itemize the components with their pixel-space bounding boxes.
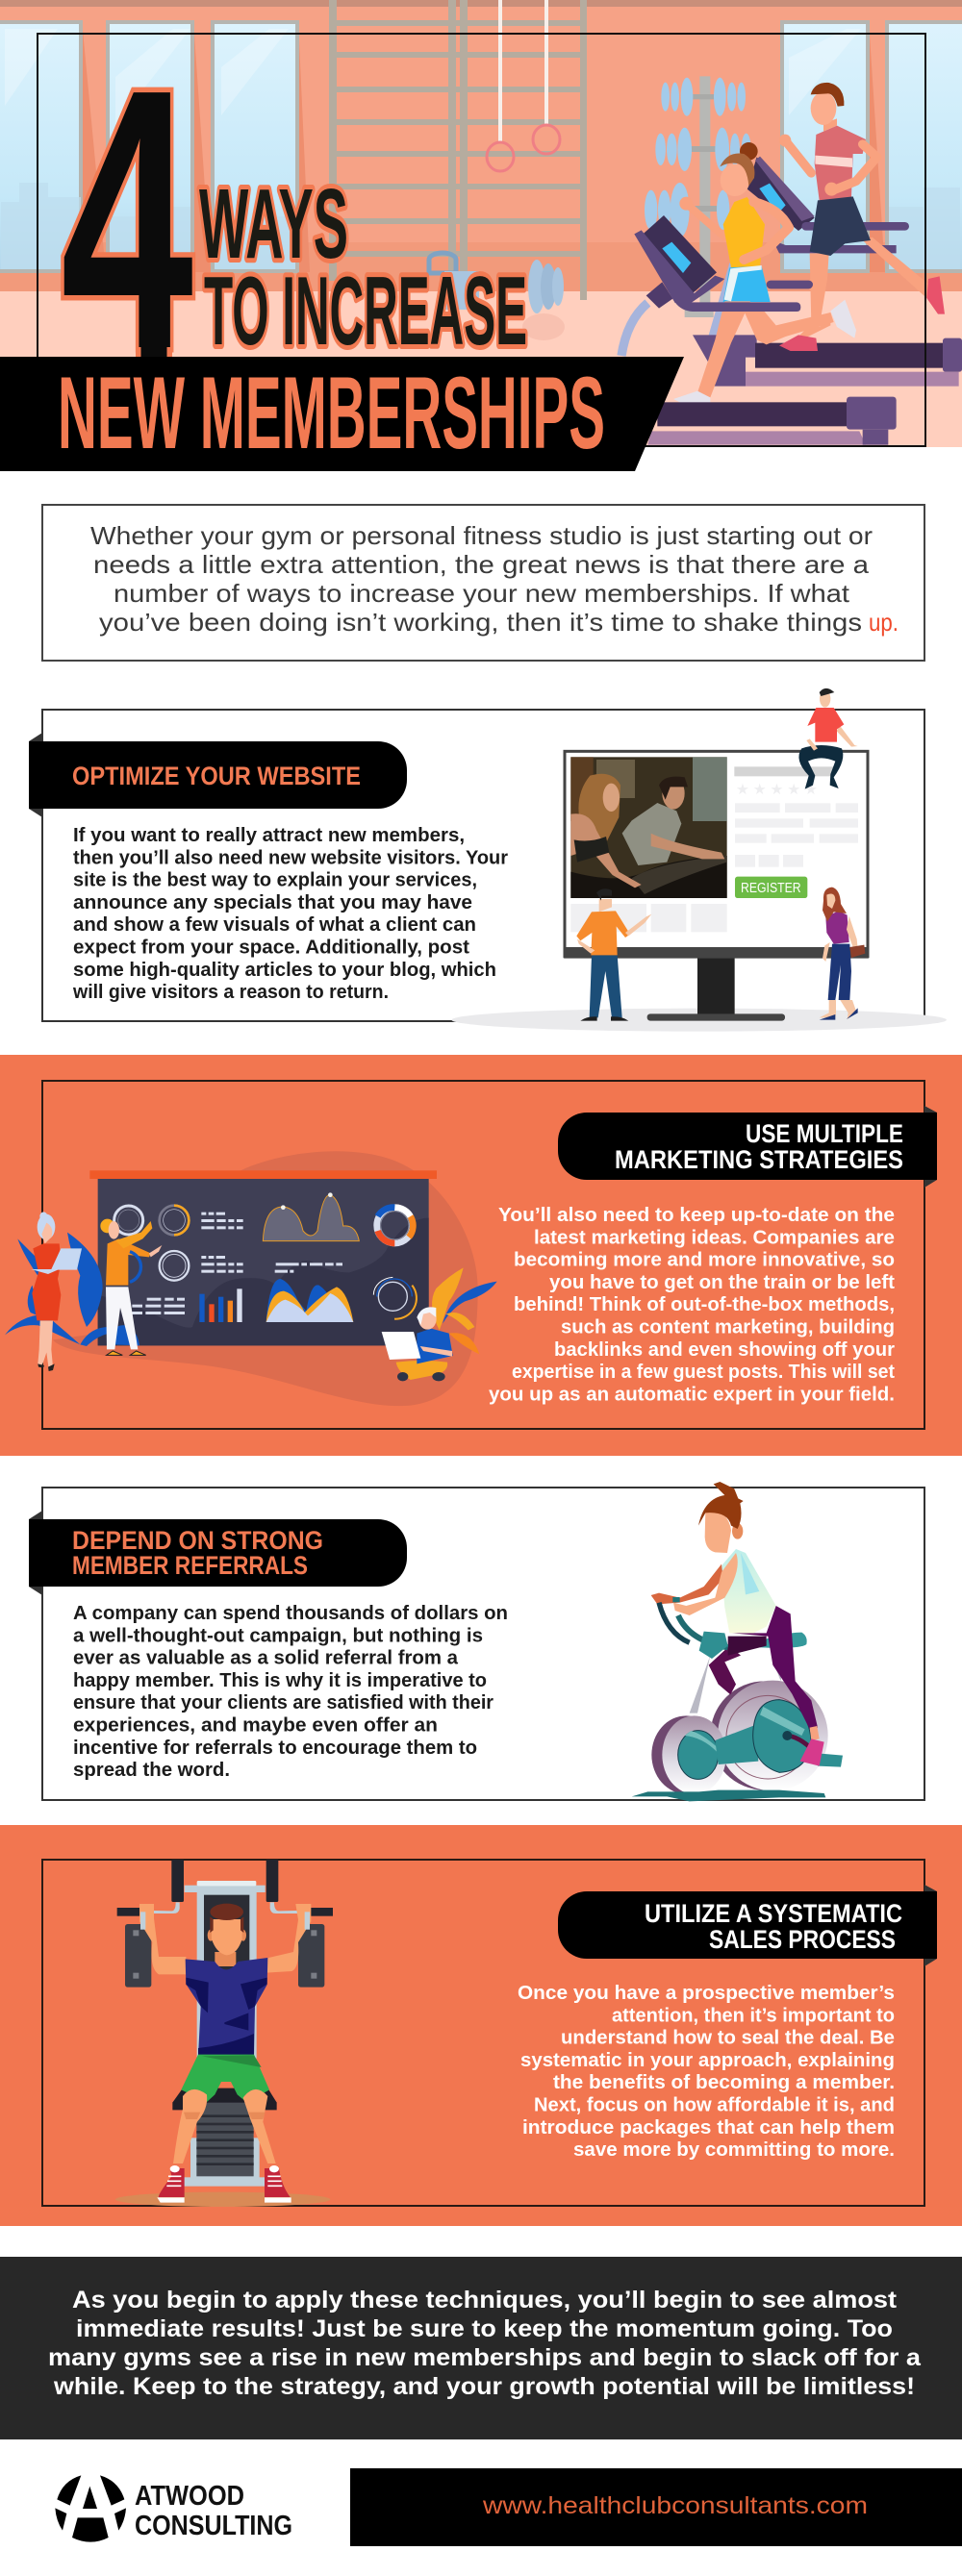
heading badge: MARKETING STRATEGIES — [615, 1145, 903, 1174]
intro panel: you’ve been doing isn’t working, then it’s time to shake things — [99, 608, 862, 637]
woman — [578, 774, 620, 849]
body text — [518, 1983, 895, 2161]
body text: save more by committing to more. — [573, 2139, 895, 2161]
monitor — [564, 751, 869, 1021]
body text: A company can spend thousands of dollars on — [73, 1603, 508, 1624]
frame — [715, 1700, 843, 1772]
ring gauges — [114, 1206, 417, 1319]
logo: atwood consulting: CONSULTING — [135, 2511, 292, 2541]
intro panel: number of ways to increase your new memberships. If what — [114, 579, 850, 608]
plant left — [5, 1233, 139, 1346]
arms — [651, 1553, 738, 1615]
website url bar: www.healthclubconsultants.com — [482, 2492, 868, 2519]
body text: the benefits of becoming a member. — [553, 2072, 895, 2093]
panel: depend on strong member referrals — [29, 1482, 924, 1801]
body text: such as content marketing, building — [561, 1317, 895, 1338]
register button — [735, 877, 807, 898]
closing statement panel: many gyms see a rise in new memberships and begin to slack off for a — [48, 2344, 922, 2371]
illustration: woman on exercise bike — [632, 1482, 843, 1801]
body text: expertise in a few guest posts. This will set — [512, 1362, 895, 1383]
left windows — [0, 20, 310, 272]
body text: a well-thought-out campaign, but nothing is — [73, 1625, 483, 1646]
seat and post — [690, 1633, 807, 1713]
icon: logo mark — [55, 2475, 126, 2542]
head — [208, 1904, 246, 1966]
page placeholder blocks: ★★★★★ — [736, 782, 822, 798]
closing statement panel: As you begin to apply these techniques, you’ll begin to see almost — [72, 2287, 898, 2313]
illustration: website on monitor with people — [451, 688, 947, 1032]
infographic page: TO INCREASE — [204, 258, 527, 365]
body text: ensure that your clients are satisfied with their — [73, 1692, 494, 1713]
body text: You’ll also need to keep up-to-date on the — [498, 1205, 895, 1226]
handlebars — [659, 1597, 728, 1659]
body text: attention, then it’s important to — [612, 2005, 895, 2026]
body text: will give visitors a reason to return. — [72, 982, 389, 1003]
person: woman with laptop — [31, 1212, 82, 1371]
body text: site is the best way to explain your services, — [73, 870, 477, 891]
register button: REGISTER — [741, 881, 801, 896]
head and hair — [698, 1482, 744, 1553]
body text: you up as an automatic expert in your field. — [489, 1384, 895, 1405]
rear wheel — [710, 1681, 828, 1790]
intro panel: needs a little extra attention, the great news is that there are a — [93, 550, 870, 579]
numeral 4: 4 — [61, 12, 195, 426]
person: man in red sitting — [798, 688, 858, 789]
closing statement panel: while. Keep to the strategy, and your growth potential will be limitless! — [53, 2373, 915, 2400]
rider torso — [722, 1549, 776, 1633]
gym rings — [487, 0, 560, 171]
body text: systematic in your approach, explaining — [520, 2050, 895, 2071]
shorts — [181, 2055, 269, 2103]
logo: atwood consulting — [55, 2475, 292, 2542]
heading badge: SALES PROCESS — [709, 1925, 896, 1954]
person: man in orange — [576, 888, 651, 1021]
body text: understand how to seal the deal. Be — [561, 2028, 895, 2049]
wall bars — [329, 0, 587, 300]
header frame — [38, 34, 925, 446]
body text: Next, focus on how affordable it is, and — [534, 2094, 895, 2115]
page placeholder blocks — [570, 782, 858, 932]
body text: then you’ll also need new website visitors. Your — [73, 847, 508, 868]
man runner — [779, 83, 945, 351]
heading badge: UTILIZE A SYSTEMATIC — [645, 1899, 902, 1928]
dumbbell rack — [645, 76, 751, 317]
rider legs — [709, 1606, 824, 1766]
website url bar — [350, 2468, 962, 2546]
legs — [173, 2089, 276, 2163]
runners on treadmills — [621, 76, 962, 445]
back treadmill — [693, 157, 962, 387]
body text: expect from your space. Additionally, post — [73, 937, 469, 958]
title: ways: WAYS — [199, 168, 348, 279]
sneakers — [157, 2165, 291, 2203]
panel: utilize a systematic sales process — [42, 1860, 937, 2207]
heading badge: MEMBER REFERRALS — [72, 1551, 308, 1580]
person: man sitting with laptop — [382, 1307, 453, 1381]
person: woman in purple — [820, 888, 865, 1020]
closing statement panel — [0, 2257, 962, 2439]
plant right — [432, 1267, 497, 1354]
band: orange section — [0, 1055, 962, 1456]
body text: experiences, and maybe even offer an — [73, 1715, 438, 1737]
illustration: man on chest press — [115, 1860, 333, 2207]
person: woman pointing — [100, 1219, 162, 1355]
body text — [72, 825, 508, 1003]
right windows — [782, 20, 962, 272]
body text: happy member. This is why it is imperative to — [73, 1670, 487, 1691]
heading badge: USE MULTIPLE — [746, 1119, 903, 1148]
body text — [73, 1603, 508, 1781]
text dashes — [132, 1213, 342, 1314]
tank top — [186, 1958, 267, 2056]
intro panel: Whether your gym or personal fitness studio is just starting out or — [90, 521, 873, 550]
body text: spread the word. — [73, 1760, 230, 1781]
heading badge: DEPEND ON STRONG — [72, 1526, 323, 1555]
stacked area chart — [266, 1279, 353, 1322]
front wheel — [651, 1715, 726, 1794]
body text — [489, 1205, 895, 1405]
intro panel: up. — [869, 608, 899, 637]
panel: use multiple marketing strategies — [5, 1081, 937, 1429]
heading badge — [558, 1885, 937, 1966]
heading badge — [29, 733, 407, 817]
body text: announce any specials that you may have — [73, 892, 472, 913]
bar chart — [199, 1288, 242, 1322]
man — [622, 803, 681, 865]
panel: optimize your website — [29, 688, 947, 1032]
woman runner — [673, 142, 856, 412]
gym photo — [570, 757, 727, 898]
body text: If you want to really attract new members, — [73, 825, 465, 846]
arms and hands — [139, 1904, 311, 1974]
body text: Once you have a prospective member’s — [518, 1983, 895, 2004]
body text: introduce packages that can help them — [522, 2117, 895, 2138]
body text: latest marketing ideas. Companies are — [534, 1227, 895, 1248]
feet of bike — [632, 1790, 825, 1801]
machine frame — [117, 1860, 333, 2187]
header: gym scene background — [0, 0, 962, 447]
body text: some high-quality articles to your blog, which — [73, 960, 496, 981]
band: orange section — [0, 1825, 962, 2226]
body text: becoming more and more innovative, so — [514, 1250, 895, 1271]
closing statement panel: immediate results! Just be sure to keep the momentum going. Too — [76, 2315, 893, 2342]
body text: you have to get on the train or be left — [549, 1272, 895, 1293]
numeral 4 — [61, 12, 195, 426]
body text: ever as valuable as a solid referral from a — [73, 1648, 459, 1669]
floor weights — [429, 253, 565, 340]
line area chart — [263, 1192, 359, 1241]
heading badge — [558, 1106, 937, 1188]
intro panel — [42, 505, 924, 661]
body text: incentive for referrals to encourage them to — [73, 1738, 477, 1759]
title banner — [0, 355, 684, 471]
body text: behind! Think of out-of-the-box methods, — [514, 1294, 895, 1315]
body text: backlinks and even showing off your — [554, 1339, 895, 1361]
logo: atwood consulting: ATWOOD — [135, 2481, 244, 2512]
front treadmill — [621, 215, 897, 445]
body text: and show a few visuals of what a client can — [73, 914, 476, 936]
heading badge — [29, 1511, 407, 1595]
illustration: data dashboard with people — [5, 1151, 497, 1406]
heading badge: OPTIMIZE YOUR WEBSITE — [72, 762, 361, 790]
